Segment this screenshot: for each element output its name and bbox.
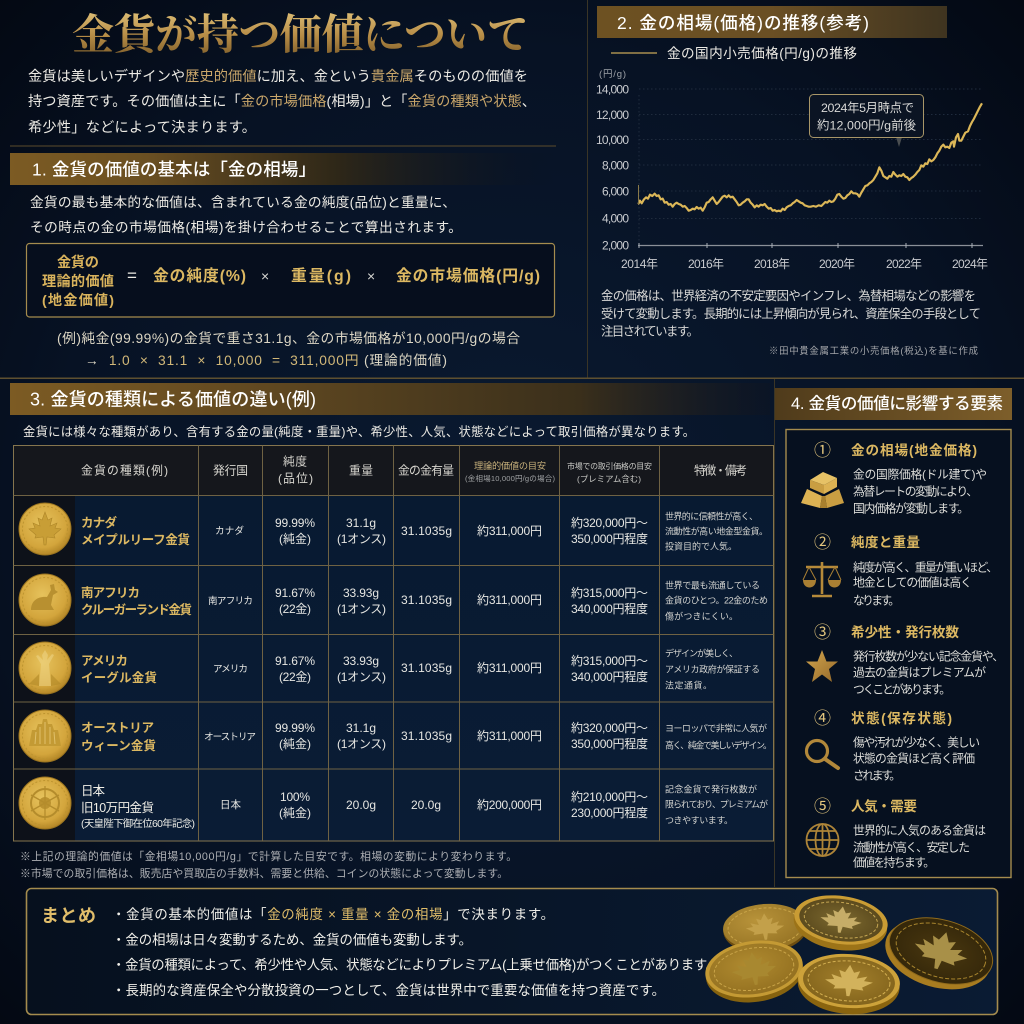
summary bullets: ・金貨の種類によって、希少性や人気、状態などによりプレミアム(上乗せ価格)がつくことがあります。 xyxy=(112,956,719,972)
formula box: 理論的価値 xyxy=(42,273,114,290)
intro paragraph: 持つ資産です。その価値は主に「金の市場価格(相場)」と「金貨の種類や状態、 xyxy=(28,93,536,110)
chart callout xyxy=(810,94,924,147)
row: Austria Philharmonic: 高く、純金で美しいデザイン。 xyxy=(665,740,772,750)
factor 1: market price: 金の相場(地金価格) xyxy=(851,442,977,458)
factor 3: rarity: 過去の金貨はプレミアムが xyxy=(853,666,986,680)
row: American Eagle: 法定通貨。 xyxy=(665,680,712,690)
factor 5: popularity: 流動性が高く、安定した xyxy=(853,840,970,854)
line chart: gold retail price: 6,000 xyxy=(602,184,629,198)
worked example: → 1.0 × 31.1 × 10,000 = 311,000円 (理論的価値) xyxy=(85,352,447,368)
panel: introduction xyxy=(28,12,536,136)
table header row: 発行国 xyxy=(213,464,248,478)
row: Canada Maple Leaf: 流動性が高い地金型金貨。 xyxy=(665,526,768,536)
factor 1: market price xyxy=(801,441,987,516)
row: American Eagle: (22金) xyxy=(279,670,311,684)
row: South Africa Krugerrand: クルーガーランド金貨 xyxy=(81,602,192,617)
row: South Africa Krugerrand: 33.93g xyxy=(343,586,379,600)
row: American Eagle: 33.93g xyxy=(343,654,379,668)
table header row: 金の金有量 xyxy=(398,464,454,478)
summary bullets xyxy=(112,906,719,998)
line chart: gold retail price: 2,000 xyxy=(602,238,629,252)
table header row: 市場での取引価格の目安 xyxy=(567,461,652,471)
row: Austria Philharmonic: ヨーロッパで非常に人気が xyxy=(665,722,767,734)
table header row: 金貨の種類(例) xyxy=(81,464,168,478)
factor 3: rarity: ③ xyxy=(814,623,831,642)
row: South Africa Krugerrand: 世界で最も流通している xyxy=(665,580,760,590)
summary bullets: ・金貨の基本的価値は「金の純度 × 重量 × 金の相場」で決まります。 xyxy=(112,906,554,922)
row: Japan 100,000 yen: 20.0g xyxy=(411,798,441,812)
row: Austria Philharmonic: オーストリア xyxy=(204,732,256,743)
formula box: × xyxy=(367,268,375,284)
factor 1: market price: 為替レートの変動により、 xyxy=(853,484,978,498)
factor 4: condition: ④ xyxy=(814,709,831,728)
factor 2: purity and weight: 純度が高く、重量が重いほど、 xyxy=(853,560,998,574)
summary bullets: ・金の相場は日々変動するため、金貨の価値も変動します。 xyxy=(112,932,472,948)
row: South Africa Krugerrand: 約315,000円〜 xyxy=(571,585,648,600)
row: Canada Maple Leaf: 350,000円程度 xyxy=(571,531,648,546)
section 1 paragraph xyxy=(30,194,462,235)
panel: summary xyxy=(26,888,1000,1017)
factor 2: purity and weight: 地金としての価値は高く xyxy=(853,576,972,590)
row: Austria Philharmonic: 99.99% xyxy=(275,721,315,735)
table header row: (金相場10,000円/gの場合) xyxy=(465,473,555,483)
line chart: gold retail price: 8,000 xyxy=(602,158,629,172)
intro paragraph: 金貨は美しいデザインや歴史的価値に加え、金という貴金属そのものの価値を xyxy=(28,68,528,85)
row: Canada Maple Leaf: 投資目的で人気。 xyxy=(665,540,737,552)
factor 4: condition: 傷や汚れが少なく、美しい xyxy=(853,736,980,750)
row: South Africa Krugerrand: 傷がつきにくい。 xyxy=(665,610,738,622)
line chart: gold retail price: 12,000 xyxy=(596,108,629,122)
row: American Eagle: (1オンス) xyxy=(337,670,386,684)
row: American Eagle: 340,000円程度 xyxy=(571,669,648,684)
factor 5: popularity: ⑤ xyxy=(814,797,831,816)
row: Canada Maple Leaf: 31.1g xyxy=(346,516,376,530)
icon: star xyxy=(806,650,838,682)
row: Japan 100,000 yen: つきやすいます。 xyxy=(665,816,733,826)
row: Japan 100,000 yen: 限られており、プレミアムが xyxy=(665,798,768,810)
icon: magnifying glass xyxy=(806,740,838,768)
row: American Eagle: アメリカ政府が保証する xyxy=(665,664,760,674)
row: South Africa Krugerrand: (1オンス) xyxy=(337,602,386,616)
heading bar 4: 4. 金貨の価値に影響する要素 xyxy=(791,394,1003,413)
factor 5: popularity: 世界的に人気のある金貨は xyxy=(853,824,986,838)
icon: balance scales xyxy=(803,562,841,596)
row: South Africa Krugerrand xyxy=(19,574,768,626)
row: Canada Maple Leaf: 世界的に信頼性が高く、 xyxy=(665,510,758,522)
row: American Eagle xyxy=(19,642,760,694)
row: Japan 100,000 yen: 230,000円程度 xyxy=(571,805,648,820)
section 3 paragraph: 金貨には様々な種類があり、含有する金の量(純度・重量)や、希少性、人気、状態などによって取引価格が異なります。 xyxy=(23,424,695,439)
row: South Africa Krugerrand: 南アフリカ xyxy=(81,586,140,600)
factors box xyxy=(786,430,1011,878)
table header row: (品位) xyxy=(278,472,313,486)
gold coin pile illustration xyxy=(702,890,1000,1017)
table footnotes: ※市場での取引価格は、販売店や買取店の手数料、需要と供給、コインの状態によって変動します。 xyxy=(20,866,508,880)
row: Japan 100,000 yen: 記念金貨で発行枚数が xyxy=(665,784,757,794)
line chart: gold retail price: 2020年 xyxy=(819,257,855,271)
panel: section 2 gold price trend xyxy=(596,6,988,356)
heading bar 1 xyxy=(10,153,556,185)
coin: maple leaf xyxy=(19,503,71,555)
factor 1: market price: 国内価格が変動します。 xyxy=(853,502,969,516)
row: American Eagle: 91.67% xyxy=(275,654,315,668)
factor 1: market price: 金の国際価格(ドル建て)や xyxy=(853,468,987,482)
formula box xyxy=(26,244,554,317)
formula box: 金の純度(%) xyxy=(153,266,246,285)
heading bar 2 xyxy=(597,6,947,38)
row: Japan 100,000 yen: (天皇陛下御在位60年記念) xyxy=(81,817,195,830)
heading bar 3 xyxy=(10,383,770,415)
row: Japan 100,000 yen: 旧10万円金貨 xyxy=(81,800,154,815)
chart commentary xyxy=(601,288,981,338)
row: Japan 100,000 yen: 日本 xyxy=(81,784,105,798)
heading bar 2: 2. 金の相場(価格)の推移(参考) xyxy=(617,13,869,33)
row: Canada Maple Leaf: メイプルリーフ金貨 xyxy=(81,532,190,547)
icon: globe xyxy=(806,824,838,856)
line chart: gold retail price: 14,000 xyxy=(596,82,629,96)
coin: springbok xyxy=(19,574,71,626)
chart commentary: 金の価格は、世界経済の不安定要因やインフレ、為替相場などの影響を xyxy=(601,288,976,303)
row: Austria Philharmonic: 約311,000円 xyxy=(477,728,542,743)
section 1 paragraph: 金貨の最も基本的な価値は、含まれている金の純度(品位)と重量に、 xyxy=(30,194,456,210)
title: 金貨が持つ価値について xyxy=(72,12,529,59)
row: Austria Philharmonic xyxy=(19,710,772,762)
row: Austria Philharmonic: 31.1035g xyxy=(401,729,452,743)
row: American Eagle: アメリカ xyxy=(81,654,128,668)
line chart: gold retail price: 2024年 xyxy=(952,257,988,271)
row: Canada Maple Leaf: 約320,000円〜 xyxy=(571,515,648,530)
coin: standing figure xyxy=(19,642,71,694)
row: Canada Maple Leaf: 99.99% xyxy=(275,516,315,530)
row: Japan 100,000 yen: 100% xyxy=(280,790,310,804)
heading bar 4 xyxy=(775,388,1012,420)
table header row: 重量 xyxy=(349,464,373,478)
formula box: (地金価値) xyxy=(42,292,114,309)
coin: Japan emblem xyxy=(19,777,71,829)
summary bullets: ・長期的な資産保全や分散投資の一つとして、金貨は世界中で重要な価値を持つ資産です。 xyxy=(112,982,665,998)
table header row: (プレミアム含む) xyxy=(577,474,641,484)
table header row: 特徴・備考 xyxy=(694,462,747,478)
worked example xyxy=(57,330,520,368)
row: American Eagle: 約311,000円 xyxy=(477,660,542,675)
chart commentary: 受けて変動します。長期的には上昇傾向が見られ、資産保全の手段として xyxy=(601,306,981,321)
line chart: gold retail price: 2022年 xyxy=(886,257,922,271)
row: Austria Philharmonic: 31.1g xyxy=(346,721,376,735)
source note: ※田中貴金属工業の小売価格(税込)を基に作成 xyxy=(769,345,978,356)
panel: section 3 coin types xyxy=(10,383,774,880)
factor 5: popularity: 人気・需要 xyxy=(851,798,917,814)
formula box: = xyxy=(127,266,137,285)
factor 5: popularity: 価値を持ちます。 xyxy=(853,856,935,870)
row: American Eagle: アメリカ xyxy=(213,664,248,675)
table header row: 理論的価値の目安 xyxy=(474,460,546,471)
row: South Africa Krugerrand: 南アフリカ xyxy=(208,595,253,607)
row: Japan 100,000 yen: 日本 xyxy=(220,798,242,811)
row: South Africa Krugerrand: 約311,000円 xyxy=(477,592,542,607)
line chart: gold retail price: 4,000 xyxy=(602,212,629,226)
chart callout: 約12,000円/g前後 xyxy=(817,118,917,132)
row: Austria Philharmonic: (純金) xyxy=(279,737,311,751)
row: American Eagle: 31.1035g xyxy=(401,661,452,675)
table footnotes xyxy=(20,849,517,880)
row: South Africa Krugerrand: 31.1035g xyxy=(401,593,452,607)
coin: organ pipes xyxy=(19,710,71,762)
row: Austria Philharmonic: 約320,000円〜 xyxy=(571,720,648,735)
panel: section 4 influencing factors xyxy=(775,388,1012,878)
line chart: gold retail price: 2014年 xyxy=(621,257,658,271)
formula box: 金貨の xyxy=(57,254,99,271)
row: American Eagle: 約315,000円〜 xyxy=(571,653,648,668)
row: Japan 100,000 yen: 約210,000円〜 xyxy=(571,789,648,804)
formula box: × xyxy=(261,268,269,284)
row: South Africa Krugerrand: (22金) xyxy=(279,602,311,616)
formula box: 金の市場価格(円/g) xyxy=(396,266,540,285)
factor 2: purity and weight: 純度と重量 xyxy=(851,534,920,550)
factor 4: condition: されます。 xyxy=(853,768,901,782)
row: Austria Philharmonic: オーストリア xyxy=(81,721,154,735)
row: Canada Maple Leaf xyxy=(19,503,768,555)
factor 1: market price: ① xyxy=(814,441,831,460)
coin comparison table xyxy=(14,446,774,841)
chart legend: 金の国内小売価格(円/g)の推移 xyxy=(667,46,857,61)
row: South Africa Krugerrand: 340,000円程度 xyxy=(571,601,648,616)
factor 4: condition: 状態の金貨ほど高く評価 xyxy=(853,752,975,766)
row: Canada Maple Leaf: カナダ xyxy=(215,525,244,537)
formula box: 重量(g) xyxy=(291,267,351,285)
factor 4: condition xyxy=(806,709,980,782)
row: Canada Maple Leaf: 31.1035g xyxy=(401,524,452,538)
factor 2: purity and weight: ② xyxy=(814,533,831,552)
factor 5: popularity xyxy=(806,797,986,870)
line chart: gold retail price xyxy=(596,69,988,271)
row: Canada Maple Leaf: 約311,000円 xyxy=(477,523,542,538)
row: Japan 100,000 yen xyxy=(19,777,768,830)
factor 3: rarity: つくことがあります。 xyxy=(853,682,951,696)
row: Japan 100,000 yen: 20.0g xyxy=(346,798,376,812)
row: Austria Philharmonic: 350,000円程度 xyxy=(571,736,648,751)
row: Canada Maple Leaf: カナダ xyxy=(81,515,117,530)
heading bar 3: 3. 金貨の種類による価値の違い(例) xyxy=(30,390,316,410)
row: Austria Philharmonic: (1オンス) xyxy=(337,737,386,751)
row: Canada Maple Leaf: (1オンス) xyxy=(337,532,386,546)
section 1 paragraph: その時点の金の市場価格(相場)を掛け合わせることで算出されます。 xyxy=(30,220,462,235)
row: American Eagle: デザインが美しく、 xyxy=(665,648,738,658)
factor 2: purity and weight xyxy=(803,533,998,608)
table header row: 純度 xyxy=(283,454,307,468)
row: Japan 100,000 yen: (純金) xyxy=(279,806,311,820)
table footnotes: ※上記の理論的価値は「金相場10,000円/g」で計算した目安です。相場の変動により変わります。 xyxy=(20,849,517,863)
summary heading: まとめ xyxy=(41,906,96,926)
row: Canada Maple Leaf: (純金) xyxy=(279,532,311,546)
factor 3: rarity: 希少性・発行枚数 xyxy=(851,624,959,640)
row: South Africa Krugerrand: 91.67% xyxy=(275,586,315,600)
chart callout: 2024年5月時点で xyxy=(821,101,914,115)
worked example: (例)純金(99.99%)の金貨で重さ31.1g、金の市場価格が10,000円/gの場合 xyxy=(57,330,520,346)
icon: gold bars xyxy=(801,472,844,508)
table header row xyxy=(81,454,747,486)
line chart: gold retail price: 2018年 xyxy=(754,257,790,271)
intro paragraph: 希少性」などによって決まります。 xyxy=(28,120,256,136)
row: American Eagle: イーグル金貨 xyxy=(81,670,157,685)
heading bar 1: 1. 金貨の価値の基本は「金の相場」 xyxy=(32,160,316,180)
row: Japan 100,000 yen: 約200,000円 xyxy=(477,797,542,812)
factor 4: condition: 状態(保存状態) xyxy=(851,710,952,726)
table grid xyxy=(14,446,774,841)
chart commentary: 注目されています。 xyxy=(601,324,699,338)
factor 2: purity and weight: なります。 xyxy=(853,594,900,608)
row: Austria Philharmonic: ウィーン金貨 xyxy=(81,738,156,753)
line chart: gold retail price: (円/g) xyxy=(599,69,626,80)
row: South Africa Krugerrand: 金貨のひとつ。22金のため xyxy=(665,594,768,606)
intro paragraph xyxy=(28,68,536,136)
factor 3: rarity: 発行枚数が少ない記念金貨や、 xyxy=(853,650,1004,664)
factor 3: rarity xyxy=(806,623,1004,696)
table fills xyxy=(14,446,774,841)
line chart: gold retail price: 10,000 xyxy=(596,133,629,147)
line chart: gold retail price: 2016年 xyxy=(688,257,724,271)
panel: section 1 gold market price basis xyxy=(10,153,556,368)
